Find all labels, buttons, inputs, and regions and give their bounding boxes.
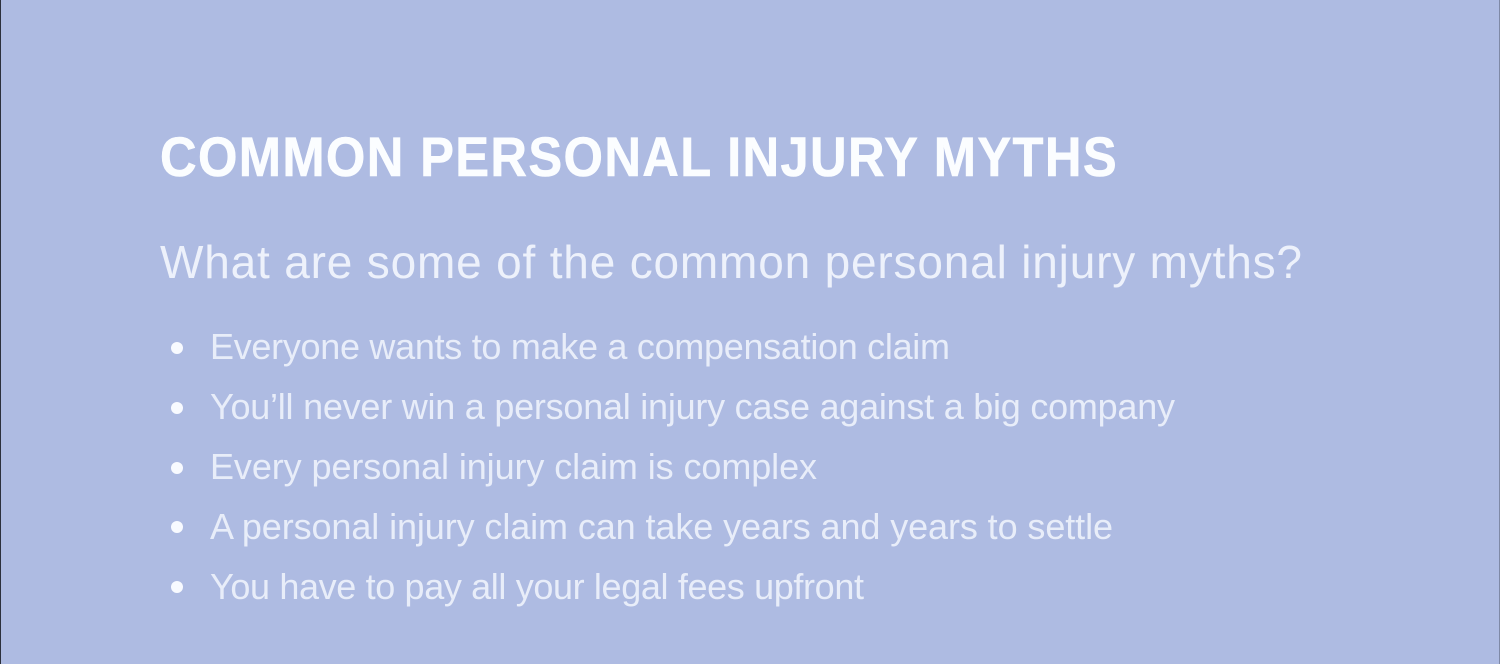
myth 3: Every personal injury claim is complex [210, 446, 817, 487]
subtitle question: What are some of the common personal injury myths? [160, 236, 1302, 288]
myth 4: A personal injury claim can take years and years to settle [210, 506, 1113, 547]
bullet list of myths [171, 326, 1175, 607]
myth 1: Everyone wants to make a compensation claim [210, 326, 950, 367]
title: COMMON PERSONAL INJURY MYTHS [160, 125, 1118, 188]
myth 2: You’ll never win a personal injury case against a big company [210, 386, 1175, 427]
myth 5: You have to pay all your legal fees upfront [210, 566, 864, 607]
